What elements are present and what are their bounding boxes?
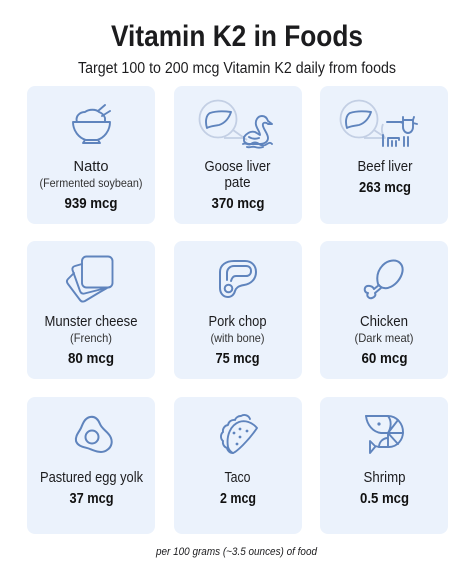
- panel: munster cheese: [27, 241, 155, 379]
- panel: pastured egg yolk: [27, 397, 155, 534]
- icon details: taco filling dots: [233, 428, 248, 445]
- value: 80 mcg: 80 mcg: [68, 351, 114, 367]
- panel: taco: [174, 397, 302, 534]
- value: 37 mcg: 37 mcg: [70, 491, 114, 507]
- panel: natto: [27, 86, 155, 224]
- icon detail: shrimp eye: [377, 422, 381, 426]
- note: with bone: (with bone): [210, 331, 264, 345]
- value: 60 mcg: 60 mcg: [362, 351, 408, 367]
- label: pate: pate: [224, 174, 250, 191]
- label: natto: Natto: [74, 158, 108, 175]
- panel: pork chop: [174, 241, 302, 379]
- icon: shrimp: [366, 416, 403, 453]
- panel: shrimp: [320, 397, 448, 534]
- icon: cow with magnified liver: [340, 100, 417, 146]
- icon: taco: [221, 415, 257, 453]
- footnote: per 100 grams (~3.5 ounces) of food: [155, 546, 318, 558]
- icon: chicken drumstick: [365, 261, 403, 298]
- value: 370 mcg: 370 mcg: [212, 196, 264, 212]
- icon: goose with magnified liver: [200, 100, 272, 148]
- note: dark meat: (Dark meat): [354, 331, 414, 345]
- note: french: (French): [70, 331, 112, 345]
- label: chicken: Chicken: [360, 313, 408, 330]
- icon: fried egg: [76, 417, 112, 452]
- icon: rice bowl: [73, 105, 110, 143]
- title: Vitamin K2 in Foods: [111, 20, 363, 53]
- icon: cheese slices: [67, 256, 112, 302]
- note: fermented soybean: (Fermented soybean): [40, 176, 142, 190]
- label: pastured egg yolk: Pastured egg yolk: [40, 469, 143, 486]
- value: 939 mcg: 939 mcg: [64, 196, 118, 212]
- label: taco: Taco: [224, 469, 250, 486]
- value: 0.5 mcg: 0.5 mcg: [360, 491, 409, 507]
- icon: pork chop: [220, 261, 256, 297]
- value: 2 mcg: 2 mcg: [220, 491, 256, 507]
- label: shrimp: Shrimp: [364, 469, 406, 486]
- panel: beef liver: [320, 86, 448, 224]
- subtitle: Target 100 to 200 mcg Vitamin K2 daily from foods: [78, 60, 396, 77]
- panel: goose liver pate: [174, 86, 302, 224]
- label: goose liver: Goose liver: [204, 158, 270, 175]
- value: 75 mcg: 75 mcg: [216, 351, 260, 367]
- label: pork chop: Pork chop: [208, 313, 266, 330]
- panel: chicken: [320, 241, 448, 379]
- label: beef liver: Beef liver: [358, 158, 413, 175]
- label: munster cheese: Munster cheese: [44, 313, 138, 330]
- value: 263 mcg: 263 mcg: [359, 180, 411, 196]
